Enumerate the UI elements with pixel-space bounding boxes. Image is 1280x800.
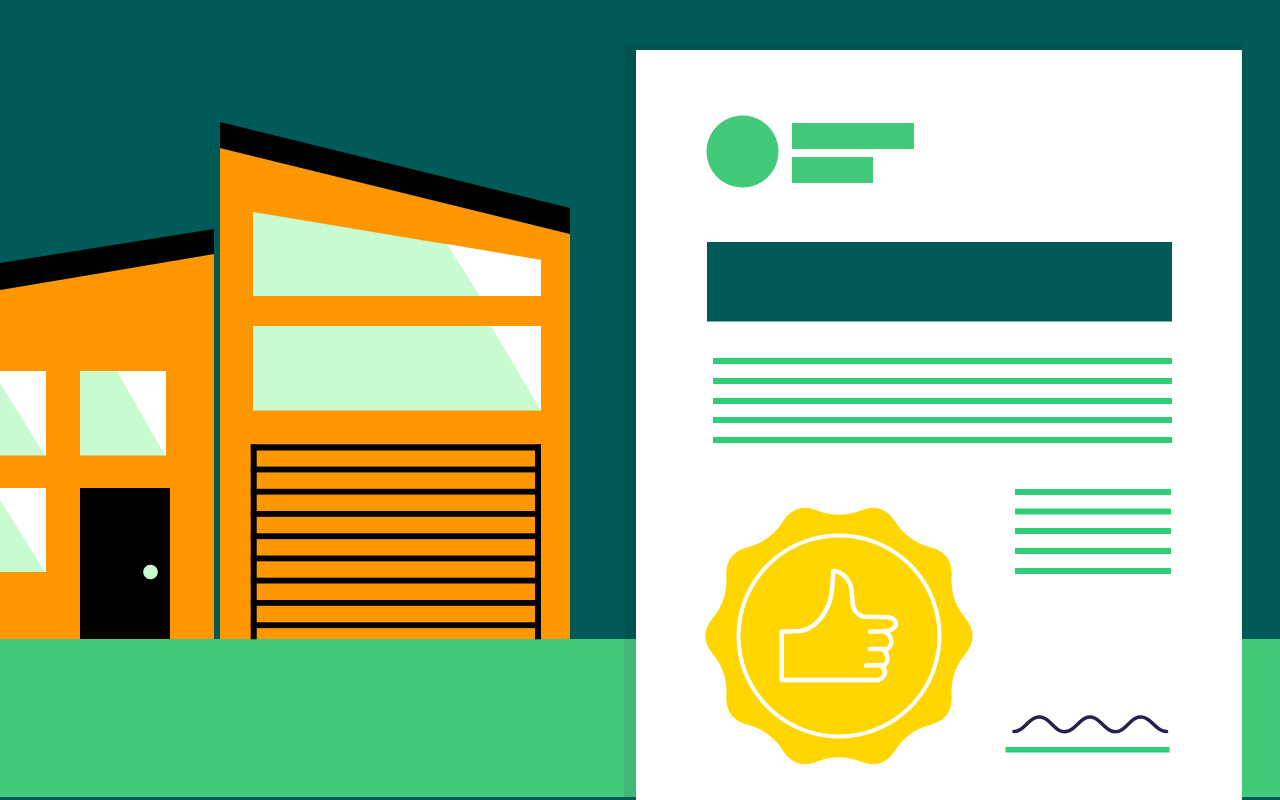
- building: left section: [0, 229, 214, 639]
- scalloped seal: [705, 508, 973, 764]
- ground: [0, 639, 1280, 797]
- signature line: [1006, 747, 1170, 752]
- window: lower left: [0, 488, 46, 572]
- side text lines: [1015, 489, 1171, 574]
- door: [80, 488, 170, 639]
- title bar: [707, 242, 1172, 322]
- signature: [1014, 717, 1166, 732]
- building: right section: [220, 122, 570, 639]
- left building roof: [0, 229, 214, 290]
- right building wall: [220, 148, 570, 639]
- icon: thumbs up: [782, 571, 896, 680]
- right building roof: [220, 122, 570, 234]
- garage door: [251, 444, 541, 639]
- window: top wide: [253, 212, 541, 296]
- paper: [636, 50, 1242, 800]
- document shadow: [624, 44, 1242, 797]
- window: middle wide: [253, 326, 541, 410]
- seal ring: [738, 536, 940, 736]
- window: upper middle: [80, 371, 166, 456]
- seal badge: [705, 508, 973, 764]
- header text bars: [792, 123, 914, 183]
- logo circle: [706, 116, 778, 188]
- document: certificate: [636, 50, 1242, 800]
- window: upper left: [0, 371, 46, 456]
- left building wall: [0, 254, 214, 639]
- body text lines: [713, 358, 1172, 443]
